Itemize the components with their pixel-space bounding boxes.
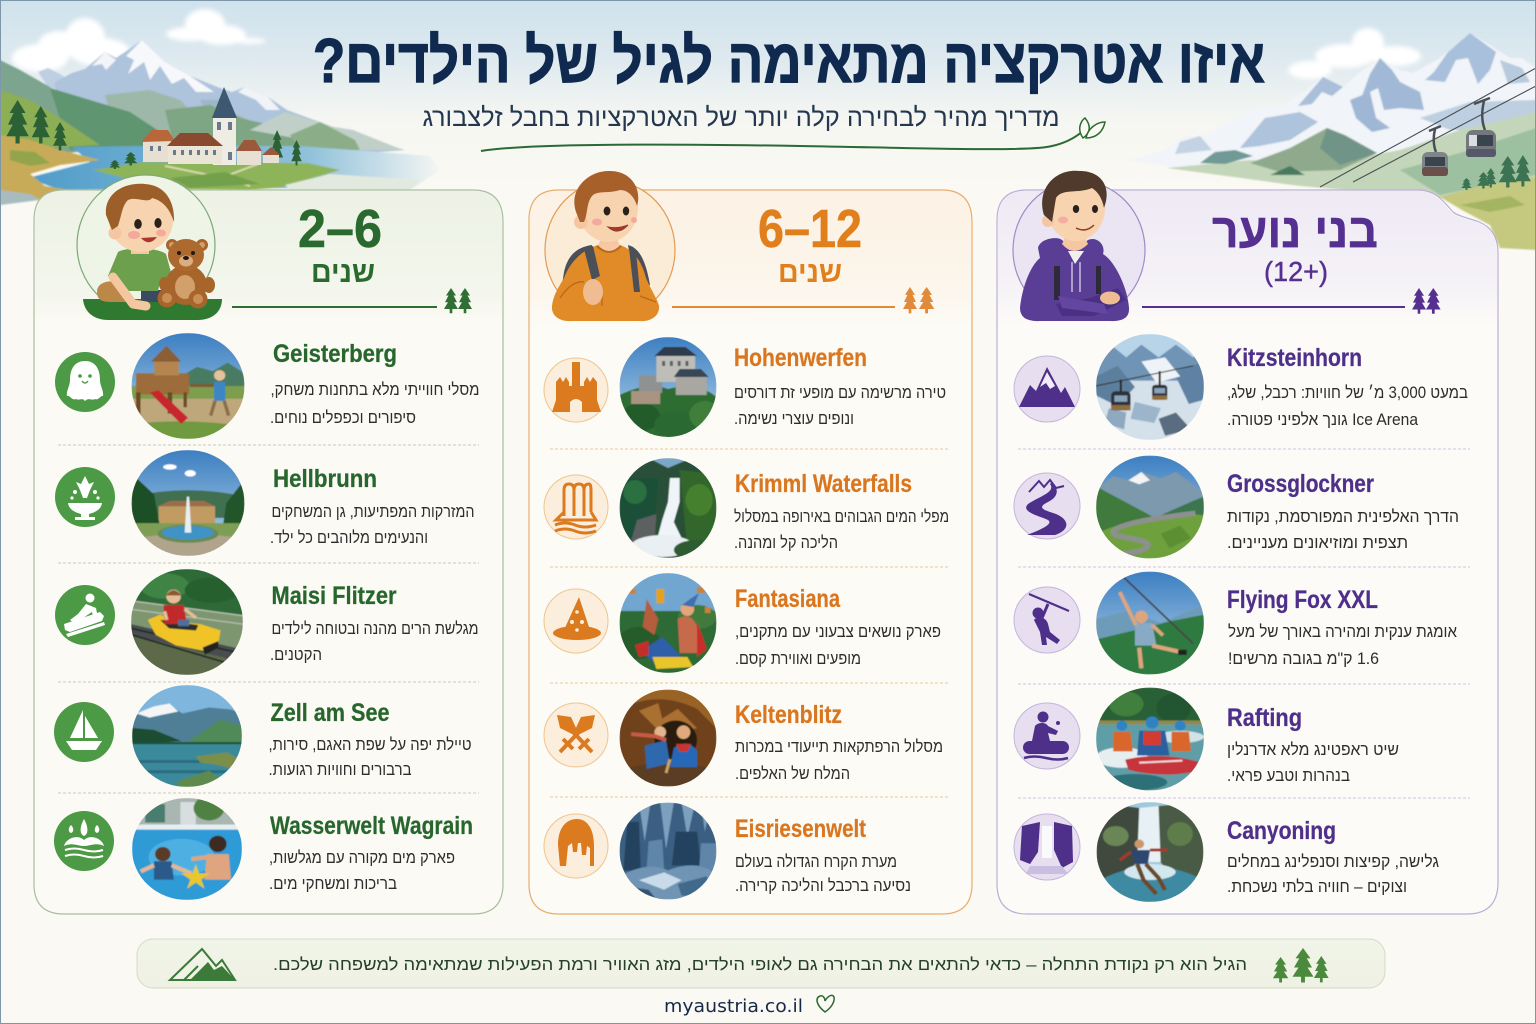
icon: heart [817, 995, 834, 1012]
icon: pine trees [903, 287, 934, 313]
description: בנהרות וטבע פראי. [1227, 767, 1350, 785]
row: Zell am See [54, 685, 472, 787]
icon: pine trees [1412, 288, 1441, 314]
heading: age range: 6–12 [758, 199, 862, 259]
photo: canyon waterfall [1096, 802, 1204, 902]
header rule [232, 306, 437, 308]
sky wash [0, 0, 1536, 190]
description [735, 738, 943, 783]
name: Canyoning [1227, 817, 1336, 845]
description: טיילת יפה על שפת האגם, סירות, [268, 736, 472, 754]
description: מערת הקרח הגדולה בעולם [735, 853, 897, 871]
description: בריכות ומשחקי מים. [269, 875, 397, 893]
heading: years: שנים [778, 256, 842, 289]
photo: theme park [618, 573, 716, 673]
description [270, 620, 478, 664]
character: teen with hoodie [1013, 171, 1145, 321]
row: Wasserwelt Wagrain [54, 796, 473, 900]
description: מופעים ואווירת קסם. [735, 650, 861, 668]
description: תצפית ומוזיאונים מעניינים. [1227, 534, 1408, 552]
photo: lake [132, 685, 242, 787]
name: Hohenwerfen [734, 344, 867, 372]
heading: teens: בני נוער [1212, 205, 1378, 258]
subtitle: מדריך מהיר לבחירה קלה יותר של האטרקציות בחבל זלצבורג [422, 102, 1060, 132]
description: סיפורים וכפפלים נוחים. [270, 409, 416, 427]
panel: teens 12+ [997, 171, 1498, 914]
description: טירה מרשימה עם מופעי זת דורסים [734, 384, 946, 402]
icon: sailboat [54, 702, 114, 762]
row: Eisriesenwelt [544, 802, 911, 900]
description [270, 381, 480, 427]
panel header tint [35, 191, 502, 325]
icon: mountain peak [1014, 356, 1080, 422]
panel frame [997, 190, 1498, 914]
name: Zell am See [270, 699, 390, 727]
description: פארק נושאים צבעוני עם מתקנים, [735, 623, 941, 641]
icon: water splash [54, 811, 114, 871]
description: נסיעה ברכבל והליכה קרירה. [735, 877, 911, 895]
description: הדרך האלפינית המפורסמת, נקודות [1227, 508, 1459, 526]
icon: alpine coaster sled [55, 585, 115, 645]
icon: mountains [170, 949, 235, 980]
character: toddler with teddy bear [77, 175, 222, 320]
row: Geisterberg [55, 333, 480, 439]
photo: glacier gondolas [1096, 334, 1204, 440]
icon: pine trees [1273, 948, 1329, 982]
name: Hellbrunn [273, 465, 377, 493]
icon: fountain [55, 467, 115, 527]
heading: age 12+: (12+) [1264, 256, 1328, 287]
row: Kitzsteinhorn [1014, 334, 1468, 440]
photo: ice cave [620, 802, 716, 900]
photo: indoor water park [132, 796, 242, 900]
tip text: הגיל הוא רק נקודת התחלה – כדאי להתאים את הבחירה גם לאופי הילדים, מזג האוויר ורמת הפעילות שמתאימה למשפחה שלכם. [273, 955, 1247, 974]
description [735, 623, 941, 668]
photo: alpine road [1096, 456, 1204, 558]
icon: waterfall [544, 475, 608, 539]
row: Rafting [1014, 688, 1399, 790]
icon: canyon [1014, 814, 1080, 880]
description: מסלי חווייתי מלא בתחנות משחק, [270, 381, 480, 399]
description: והנעימים מלוהבים כל ילד. [270, 529, 428, 547]
description [1227, 384, 1468, 429]
row: Hohenwerfen [544, 337, 946, 439]
icon: zipline [1014, 587, 1080, 653]
description: מסלול הרפתקאות תייעודי במכרות [735, 738, 943, 756]
panel: ages 6-12 [529, 171, 972, 914]
photo: fortress [620, 337, 720, 439]
description [1227, 853, 1439, 896]
row: Canyoning [1014, 802, 1439, 902]
description: אומגת ענקית ומהירה באורך של מעל [1228, 623, 1458, 641]
row: Hellbrunn [55, 450, 474, 556]
footer tip bar [137, 939, 1385, 988]
photo: white water rafting [1096, 688, 1204, 790]
row: Keltenblitz [544, 690, 943, 786]
name: Krimml Waterfalls [735, 470, 912, 498]
photo: salt mine cave [620, 690, 716, 786]
decorative swoosh with leaf [481, 118, 1105, 151]
name: Flying Fox XXL [1227, 586, 1378, 614]
description: מפלי המים הגבוהים באירופה במסלול [734, 508, 949, 526]
heading: age range: 2–6 [298, 199, 382, 259]
description [269, 849, 455, 893]
photo: waterfall [620, 458, 720, 560]
description [270, 503, 474, 547]
description: וצוקים – חוויה בלתי נשכחת. [1227, 878, 1407, 896]
photo: playground [132, 333, 244, 439]
landscape: right mountains and cable cars [1130, 28, 1536, 250]
row: Grossglockner [1014, 456, 1459, 558]
photo: flying fox zipline [1096, 572, 1204, 674]
panel: ages 2-6 [34, 175, 503, 914]
description [734, 384, 946, 428]
description: הקטנים. [270, 646, 322, 664]
description: גלישה, קפיצות וסנפלינג במחלים [1227, 853, 1439, 871]
panel header tint [998, 191, 1497, 325]
name: Kitzsteinhorn [1227, 344, 1362, 372]
description: Ice Arena גונך אלפיני פטורה. [1227, 411, 1419, 429]
character: boy with backpack [545, 171, 675, 321]
name: Maisi Flitzer [272, 582, 397, 610]
row: Flying Fox XXL [1014, 572, 1458, 674]
description: ונופים עוצרי נשימה. [734, 410, 854, 428]
heading: years: שנים [311, 256, 375, 289]
description [268, 736, 472, 779]
description: המלח של האלפים. [735, 765, 850, 783]
name: Rafting [1227, 704, 1302, 732]
description [734, 508, 949, 552]
description: 1.6 ק"מ בגובה מרשים! [1228, 650, 1379, 668]
panel header tint [530, 191, 971, 325]
name: Keltenblitz [735, 701, 842, 729]
description [1227, 508, 1459, 552]
description [1228, 623, 1458, 668]
description: שיט ראפטינג מלא אדרנלין [1227, 741, 1399, 759]
title: איזו אטרקציה מתאימה לגיל של הילדים? [313, 27, 1265, 96]
header rule [672, 306, 895, 308]
description: ברבורים וחוויות רגועות. [268, 761, 412, 779]
description: המזרקות המפתיעות, גן המשחקים [272, 503, 474, 521]
description: מגלשת הרים מהנה ובטוחה לילדים [272, 620, 478, 638]
panel frame [34, 190, 503, 914]
name: Wasserwelt Wagrain [270, 812, 473, 840]
icon: ghost [55, 352, 115, 412]
row: Krimml Waterfalls [544, 458, 949, 560]
icon: pine trees [444, 288, 472, 313]
description [1227, 741, 1399, 785]
row: Maisi Flitzer [55, 569, 478, 675]
row: Fantasiana [544, 573, 941, 673]
icon: ice arch [544, 814, 608, 878]
description: הליכה קל ומהנה. [734, 534, 838, 552]
panel frame [529, 190, 972, 914]
description [735, 853, 911, 895]
photo: palace fountain [132, 450, 244, 556]
photo: coaster [131, 569, 243, 675]
website address: myaustria.co.il [664, 997, 803, 1017]
icon: crossed swords [544, 703, 608, 767]
name: Geisterberg [273, 340, 397, 368]
name: Grossglockner [1227, 470, 1374, 498]
landscape: left mountains, lake and village [0, 9, 440, 205]
icon: winding road [1014, 473, 1080, 539]
icon: raft paddler [1014, 703, 1080, 769]
icon: wizard hat [544, 589, 608, 653]
name: Fantasiana [735, 585, 841, 613]
header rule [1142, 306, 1405, 308]
description: פארק מים מקורה עם מגלשות, [269, 849, 455, 867]
description: במעט 3,000 מ׳ של חוויות: רכבל, שלג, [1227, 384, 1468, 402]
name: Eisriesenwelt [735, 815, 867, 843]
icon: castle [544, 358, 608, 422]
